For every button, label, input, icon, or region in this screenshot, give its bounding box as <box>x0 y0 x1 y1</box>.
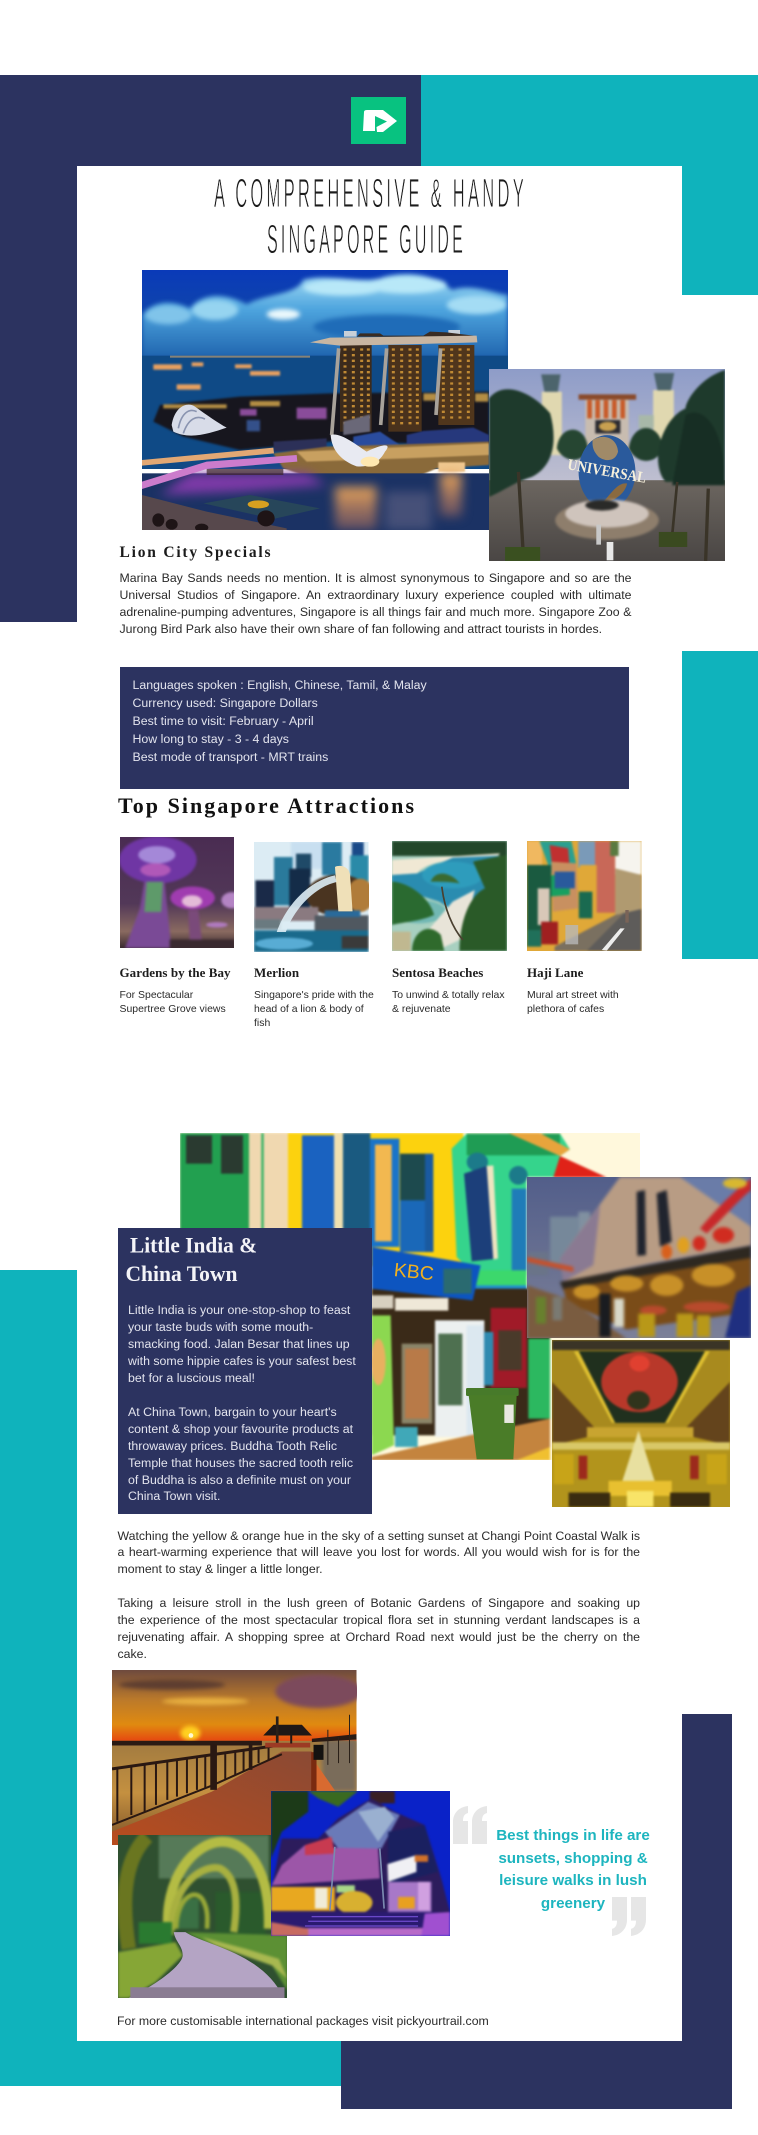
photo: Haji Lane <box>527 841 642 951</box>
text block: Little India and China Town description: content & shop your favourite products at <box>128 1422 353 1436</box>
card: Haji Lane: plethora of cafes <box>527 1004 604 1015</box>
card: Haji Lane: Haji Lane <box>527 965 583 980</box>
heading: Little India & China Town: China Town <box>125 1261 237 1286</box>
text block: Little India and China Town description <box>128 1303 356 1503</box>
text block: Little India and China Town description: At China Town, bargain to your heart's <box>128 1405 337 1419</box>
text block: Little India and China Town description: Little India is your one-stop-shop to feast <box>128 1303 350 1317</box>
heading: Top Singapore Attractions: Top Singapore Attractions <box>118 793 414 818</box>
photo: Little India shophouses <box>180 1133 640 1460</box>
text block: sunset and botanic gardens: rejuvenating affair. A shopping spree at Orchard Road next would just be the cherry on the <box>118 1630 640 1644</box>
card: Sentosa Beaches: & rejuvenate <box>392 1004 451 1015</box>
text block: sunset and botanic gardens: Taking a leisure stroll in the lush green of Botanic Gardens of Singapore and soaking up <box>118 1596 640 1610</box>
photo: Sentosa Beaches <box>392 841 507 951</box>
heading: Lion City Specials: Lion City Specials <box>120 544 270 561</box>
photo: Little India shophouses: KBC <box>393 1260 435 1285</box>
card: Sentosa Beaches <box>392 965 505 1015</box>
title <box>214 170 527 262</box>
panel: quick facts: Best time to visit: February - April <box>132 714 314 728</box>
text block: intro paragraph <box>120 571 632 636</box>
icon: pickyourtrail logo <box>351 97 406 144</box>
text block: intro paragraph: adrenaline-pumping adventures, Singapore is all things fair and much more. Singapore Zoo & <box>120 605 632 619</box>
photo: ION Orchard mall <box>271 1791 450 1936</box>
photo: Changi sunset boardwalk <box>112 1670 357 1845</box>
text block: sunset and botanic gardens: the experience of the most spectacular tropical flora set in stunning verdant landscapes is a <box>118 1613 640 1627</box>
photo: Gardens by the Bay <box>120 837 234 948</box>
text block: Little India and China Town description: Temple that houses the sacred tooth relic <box>128 1456 353 1470</box>
card: Haji Lane: Mural art street with <box>527 990 619 1001</box>
heading: Little India & China Town: Little India & <box>130 1232 256 1258</box>
text block: sunset and botanic gardens <box>118 1528 640 1661</box>
panel: quick facts: Best mode of transport - MRT trains <box>132 750 328 764</box>
photo: Marina Bay Sands <box>142 270 508 530</box>
text block: footer: For more customisable international packages visit pickyourtrail.com <box>117 2014 489 2028</box>
panel: quick facts <box>120 667 628 789</box>
card: Sentosa Beaches: Sentosa Beaches <box>392 965 483 980</box>
card: Haji Lane <box>527 965 619 1015</box>
photo: Universal Studios globe <box>489 369 725 561</box>
panel: Little India & China Town <box>118 1228 372 1514</box>
panel: navy top-left corner <box>0 75 421 622</box>
photo: Merlion <box>254 842 369 952</box>
photo: Buddha Tooth Relic Temple <box>552 1340 730 1507</box>
card: Gardens by the Bay: For Spectacular <box>120 990 193 1001</box>
text block: pull quote <box>496 1827 650 1912</box>
panel: teal bottom-left corner <box>0 1270 341 2086</box>
text block: Little India and China Town description: smacking food. Jalan Besar that lines up <box>128 1337 350 1351</box>
photo: Universal Studios globe: UNIVERSAL <box>566 456 647 487</box>
text block: pull quote: leisure walks in lush <box>499 1872 647 1889</box>
text block: Little India and China Town description: your taste buds with some mouth- <box>128 1320 313 1334</box>
text block: intro paragraph: Universal Studios of Singapore. An extraordinary luxury experience coupled with ultimate <box>120 588 632 602</box>
heading: Little India & China Town <box>125 1232 256 1286</box>
text block: Little India and China Town description: of Buddha is also a definite must on your <box>128 1473 351 1487</box>
panel: navy bottom-right corner <box>341 1714 732 2109</box>
card: Merlion: Singapore's pride with the <box>254 990 374 1001</box>
panel: quick facts: How long to stay - 3 - 4 days <box>132 732 289 746</box>
photo: China Town street <box>527 1177 751 1338</box>
text block: Little India and China Town description: bet for a luscious meal! <box>128 1371 255 1385</box>
card: Gardens by the Bay: Gardens by the Bay <box>120 965 231 980</box>
card: Merlion: head of a lion & body of <box>254 1004 364 1015</box>
icon: closing quote mark <box>612 1897 646 1936</box>
text block: Little India and China Town description: with some hippie cafes is your safest best <box>128 1354 356 1368</box>
card: Merlion: Merlion <box>254 965 299 980</box>
text block: Little India and China Town description: throwaway prices. Buddha Tooth Relic <box>128 1439 337 1453</box>
panel: teal right strip <box>682 651 758 959</box>
panel: quick facts: Currency used: Singapore Dollars <box>132 696 318 710</box>
card: Sentosa Beaches: To unwind & totally relax <box>392 990 505 1001</box>
text block: sunset and botanic gardens: Watching the yellow & orange hue in the sky of a setting sunset at Changi Point Coastal Walk is <box>118 1528 640 1542</box>
card: Merlion <box>254 965 374 1029</box>
panel: quick facts: Languages spoken : English, Chinese, Tamil, & Malay <box>132 678 427 692</box>
text block: sunset and botanic gardens: cake. <box>118 1647 147 1661</box>
text block: pull quote: greenery <box>541 1895 605 1912</box>
text block: intro paragraph: Marina Bay Sands needs no mention. It is almost synonymous to Singapore and so are the <box>120 571 632 585</box>
photo: Botanic Gardens arches <box>118 1835 287 1998</box>
text block: sunset and botanic gardens: a heart-warming experience that will leave you lost for words. All you would wish for is for the <box>118 1545 640 1559</box>
text block: pull quote: sunsets, shopping & <box>498 1850 648 1867</box>
card: Gardens by the Bay: Supertree Grove views <box>120 1004 226 1015</box>
icon: opening quote mark <box>453 1806 487 1844</box>
quote block <box>453 1806 650 1936</box>
text block: Little India and China Town description: China Town visit. <box>128 1489 220 1503</box>
panel: teal top-right corner <box>421 75 758 295</box>
text block: intro paragraph: Jurong Bird Park also have their own share of fan following and attract tourists in hordes. <box>120 622 602 636</box>
card: Merlion: fish <box>254 1018 270 1029</box>
text block: pull quote: Best things in life are <box>496 1827 650 1844</box>
card: Gardens by the Bay <box>120 965 231 1015</box>
text block: sunset and botanic gardens: moment to stay & linger a little longer. <box>118 1562 323 1576</box>
